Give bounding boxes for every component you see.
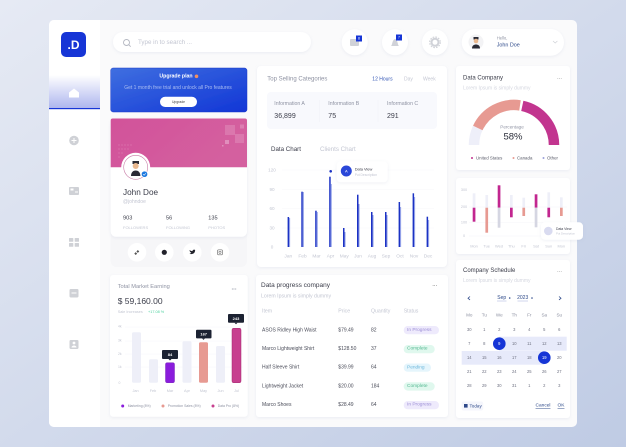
panel: total market earning: Sale Increases <box>118 310 143 314</box>
icon: grid <box>69 238 79 247</box>
calendar dates: 19 <box>542 355 547 360</box>
calendar dates: 21 <box>467 369 472 374</box>
info stats box: Information C <box>387 101 418 107</box>
table header: Status <box>404 309 419 315</box>
bell button: 7 <box>398 36 400 40</box>
stacked bar chart: 100 <box>461 221 467 225</box>
bar chart: data chart: Jun <box>354 254 362 260</box>
panel: company schedule <box>456 260 570 418</box>
table rows: 64 <box>371 402 377 408</box>
calendar dates: 2 <box>543 383 546 388</box>
search bar: Type in to search ... <box>138 39 192 46</box>
bar chart: market: Jul <box>234 389 239 393</box>
bar chart: market: 1k <box>118 365 122 369</box>
table rows: $39.99 <box>338 365 354 371</box>
calendar dates: 3 <box>558 383 561 388</box>
panel: data company: Data Company <box>463 75 503 81</box>
panel: data company: Percentage <box>500 124 524 130</box>
icon: contact <box>70 340 78 349</box>
legend: market: Promotion Sales (8%) <box>168 404 201 408</box>
profile card: @johndoe <box>123 199 146 205</box>
bar chart: data chart: 120 <box>268 168 276 172</box>
calendar weekdays: Mo <box>466 312 473 318</box>
bar chart: market: Mar <box>167 389 174 393</box>
table rows: Half Sleeve Shirt <box>262 365 300 371</box>
panel: data company: 58% <box>503 132 523 142</box>
icon: twitter <box>183 243 202 262</box>
icon: plus <box>69 136 79 145</box>
calendar dates: 29 <box>482 383 487 388</box>
profile card: 903 <box>123 216 132 222</box>
user pill: John Doe <box>497 43 520 49</box>
stacked bar chart: Wed <box>495 244 503 248</box>
bar chart: market: May <box>200 389 207 393</box>
bar chart: data chart: May <box>340 254 349 260</box>
panel: data company: Lorem Ipsum is simply dummy <box>463 85 531 91</box>
bar chart: data chart: Sep <box>382 254 391 260</box>
profile card: FOLLOWING <box>166 225 190 230</box>
bar chart: data chart: 0 <box>271 244 274 250</box>
value tooltips: 167 <box>200 332 208 336</box>
bar chart: market: 4k <box>118 325 122 329</box>
calendar weekdays: We <box>496 312 503 318</box>
table rows: 37 <box>371 346 377 352</box>
logo <box>61 32 86 57</box>
profile card: John Doe <box>123 188 158 197</box>
calendar dates: 2 <box>498 327 501 332</box>
calendar dates: 26 <box>542 369 547 374</box>
calendar dates: 12 <box>542 341 547 346</box>
calendar dates: 1 <box>528 383 531 388</box>
info stats box: 36,899 <box>274 113 296 120</box>
panel: top selling categories: 12 Hours <box>372 76 393 82</box>
calendar dates: 6 <box>558 327 561 332</box>
bar chart: data chart <box>268 168 434 260</box>
bar chart: market: Jun <box>217 389 224 393</box>
legend: gauge: United States <box>476 156 503 160</box>
panel: data progress company: ... <box>432 282 438 288</box>
panel: total market earning: +17.08 % <box>148 310 165 314</box>
value tooltips: 84 <box>168 352 173 357</box>
calendar weekdays <box>466 312 563 318</box>
icon: instagram <box>211 243 229 262</box>
table rows: 64 <box>371 365 377 371</box>
profile avatar <box>121 153 150 182</box>
calendar dates: 3 <box>513 327 516 332</box>
panel: data progress company <box>256 275 448 417</box>
user pill: Hello, <box>497 36 507 40</box>
table rows: Marco Shoes <box>262 402 292 408</box>
bar chart: data chart: Dec <box>424 254 433 260</box>
calendar dates: 8 <box>483 341 486 346</box>
info stats box: 75 <box>328 113 336 120</box>
calendar dates: 30 <box>497 383 502 388</box>
status pills: Complete <box>407 383 428 389</box>
gauge chart <box>474 105 554 145</box>
panel: company schedule: Company Schedule <box>463 268 516 274</box>
calendar dates: 13 <box>557 341 562 346</box>
info stats box <box>267 92 437 129</box>
social tray <box>111 225 247 267</box>
active home item <box>49 75 100 109</box>
bar chart: market: 0 <box>118 381 120 385</box>
panel: data progress company: Data progress company <box>261 282 331 289</box>
bell button <box>382 29 408 55</box>
bar chart: market <box>118 314 244 393</box>
status pills: Pending <box>407 364 425 370</box>
panel: company schedule: Lorem Ipsum is simply dummy <box>463 278 531 284</box>
profile card: PHOTOS <box>208 225 225 230</box>
legend: gauge <box>471 156 559 160</box>
upgrade banner: Get 1 month free trial and unlock all Pro features <box>124 85 232 91</box>
calendar navigation: Sep <box>497 295 506 301</box>
bar chart: market: 2k <box>118 352 122 356</box>
today button <box>462 402 483 410</box>
settings button <box>422 29 448 55</box>
table rows: $128.50 <box>338 346 357 352</box>
calendar dates: 16 <box>497 355 502 360</box>
chart tabs: Clients Chart <box>320 146 356 153</box>
stacked bar chart: 300 <box>461 188 467 192</box>
table header: Item <box>262 309 272 315</box>
icon: box <box>70 289 78 298</box>
calendar dates: 17 <box>512 355 517 360</box>
calendar dates: 23 <box>497 369 502 374</box>
info stats box: Information B <box>328 101 360 107</box>
calendar dates: 18 <box>527 355 532 360</box>
calendar dates <box>467 327 562 388</box>
calendar actions: OK <box>558 402 565 408</box>
panel: total market earning: Total Market Earning <box>118 284 170 290</box>
profile card: 56 <box>166 216 172 222</box>
callout: data view: Data View <box>355 166 373 172</box>
stacked bar chart: Sun <box>545 244 552 248</box>
status pills: In Progress <box>407 402 432 408</box>
bar chart: market: Jan <box>132 389 139 393</box>
bar chart: market: 3k <box>118 339 122 343</box>
calendar dates: 10 <box>512 341 517 346</box>
bar chart: data chart: 90 <box>269 187 275 192</box>
calendar dates: 30 <box>467 327 472 332</box>
calendar weekdays: Su <box>556 312 563 318</box>
profile banner <box>111 118 247 167</box>
sidebar <box>49 20 100 427</box>
stacked bar chart: 200 <box>461 205 467 209</box>
legend: market <box>121 404 239 408</box>
calendar dates: 20 <box>557 355 562 360</box>
today button: Today <box>470 404 482 408</box>
calendar dates: 27 <box>557 369 562 374</box>
calendar dates: 7 <box>468 341 471 346</box>
mail button: 8 <box>358 37 360 41</box>
bar chart: data chart: Apr <box>327 254 335 260</box>
bar chart: market: Feb <box>150 389 156 393</box>
bar chart: market: Apr <box>184 389 191 393</box>
calendar dates: 15 <box>482 355 487 360</box>
bar chart: data chart: Mar <box>312 254 321 260</box>
upgrade banner: Upgrade <box>172 100 185 104</box>
calendar weekdays: Tu <box>482 312 487 318</box>
value tooltips <box>162 314 244 360</box>
calendar weekdays: Th <box>512 312 517 318</box>
icon: facebook <box>155 243 174 262</box>
user avatar <box>468 34 484 50</box>
stacked bar chart <box>461 185 567 248</box>
table rows: $20.00 <box>338 383 354 389</box>
calendar actions <box>536 402 565 408</box>
callout: data view <box>337 161 388 182</box>
bar chart: data chart: Jan <box>284 254 292 260</box>
callout: data view small: Put Description <box>556 232 575 236</box>
user pill <box>462 29 564 56</box>
callout: data view: A <box>345 168 348 174</box>
calendar dates: 9 <box>498 341 501 346</box>
panel: top selling categories: Week <box>423 76 436 82</box>
table rows: Marco Lightweight Shirt <box>262 346 315 352</box>
profile card: 135 <box>208 216 218 222</box>
panel: company schedule: ... <box>557 268 562 274</box>
calendar dates: 1 <box>483 327 486 332</box>
stacked bar chart: Tue <box>483 244 490 248</box>
panel: top selling categories: Top Selling Categories <box>267 76 327 82</box>
table rows: $79.49 <box>338 327 354 333</box>
panel: total market earning <box>110 275 248 417</box>
panel: data progress company: Lorem Ipsum is simply dummy <box>261 294 331 300</box>
upgrade banner <box>111 68 247 112</box>
calendar dates: 28 <box>467 383 472 388</box>
table header <box>262 309 419 315</box>
calendar dates: 31 <box>512 383 517 388</box>
calendar weekdays: Sa <box>541 312 548 318</box>
legend: gauge: Other <box>547 156 559 160</box>
value tooltips: 243 <box>233 316 240 321</box>
status pills <box>404 326 439 409</box>
panel: data company: ... <box>557 75 562 81</box>
table header: Price <box>338 309 350 315</box>
stacked bar chart: Sat <box>533 244 540 248</box>
mail button <box>342 29 368 55</box>
calendar dates: 11 <box>527 341 532 346</box>
calendar range highlight <box>462 337 567 365</box>
icon: id card <box>69 187 79 195</box>
stacked bar chart: Fri <box>521 244 526 248</box>
legend: gauge: Canada <box>517 156 533 160</box>
search bar <box>113 32 311 52</box>
dashboard frame <box>49 20 577 427</box>
table rows <box>262 327 380 408</box>
chart tabs: Data Chart <box>271 146 301 153</box>
callout: data view: Put Description <box>355 173 377 177</box>
panel: top selling categories: Day <box>404 76 413 82</box>
calendar dates: 22 <box>482 369 487 374</box>
info stats box: Information A <box>274 101 305 107</box>
logo: .D <box>68 38 80 52</box>
calendar navigation: 2023 <box>517 295 528 301</box>
calendar navigation <box>468 295 561 301</box>
table rows: $28.49 <box>338 402 354 408</box>
bar chart: data chart: Oct <box>396 254 404 260</box>
calendar dates: 4 <box>528 327 531 332</box>
chart tabs <box>271 146 356 153</box>
profile card <box>111 118 247 237</box>
icon: link <box>128 243 146 262</box>
callout: data view small: Data View <box>556 227 572 231</box>
panel: total market earning: $ 59,160.00 <box>118 296 163 306</box>
panel: total market earning: ... <box>231 286 237 292</box>
calendar weekdays: Fr <box>527 312 532 318</box>
bar chart: data chart: Feb <box>298 254 307 260</box>
profile card: FOLLOWERS <box>123 225 148 230</box>
status pills: Complete <box>407 346 428 352</box>
bar chart: data chart: Nov <box>410 254 419 260</box>
info stats box: 291 <box>387 113 399 120</box>
stacked bar chart: Mon <box>470 244 478 248</box>
legend: market: Marketing (8%) <box>128 404 151 408</box>
stacked bar chart: 0 <box>463 234 465 238</box>
calendar dates: 24 <box>512 369 517 374</box>
table rows: ASOS Ridley High Waist <box>262 327 317 333</box>
stacked bar chart: Thu <box>508 244 515 248</box>
calendar dates: 5 <box>543 327 546 332</box>
callout: data view small <box>541 222 583 240</box>
table rows: 184 <box>371 383 380 389</box>
calendar actions: Cancel <box>536 402 550 408</box>
legend: market: Data Pro (8%) <box>218 404 239 408</box>
calendar dates: 25 <box>527 369 532 374</box>
panel: weekly stacked bars <box>456 178 583 254</box>
bar chart: data chart: 30 <box>269 226 275 230</box>
panel: data company <box>456 66 570 170</box>
table rows: 82 <box>371 327 377 333</box>
table rows: Lightweight Jacket <box>262 383 304 389</box>
bar chart: data chart: 60 <box>269 206 275 211</box>
status pills: In Progress <box>407 327 432 333</box>
bar chart: data chart: Aug <box>368 254 377 260</box>
panel: top selling categories <box>257 66 447 267</box>
stacked bar chart: Mon <box>558 244 565 248</box>
table header: Quantity <box>371 309 391 315</box>
calendar dates: 14 <box>467 355 472 360</box>
upgrade banner: Upgrade plan <box>159 73 193 79</box>
